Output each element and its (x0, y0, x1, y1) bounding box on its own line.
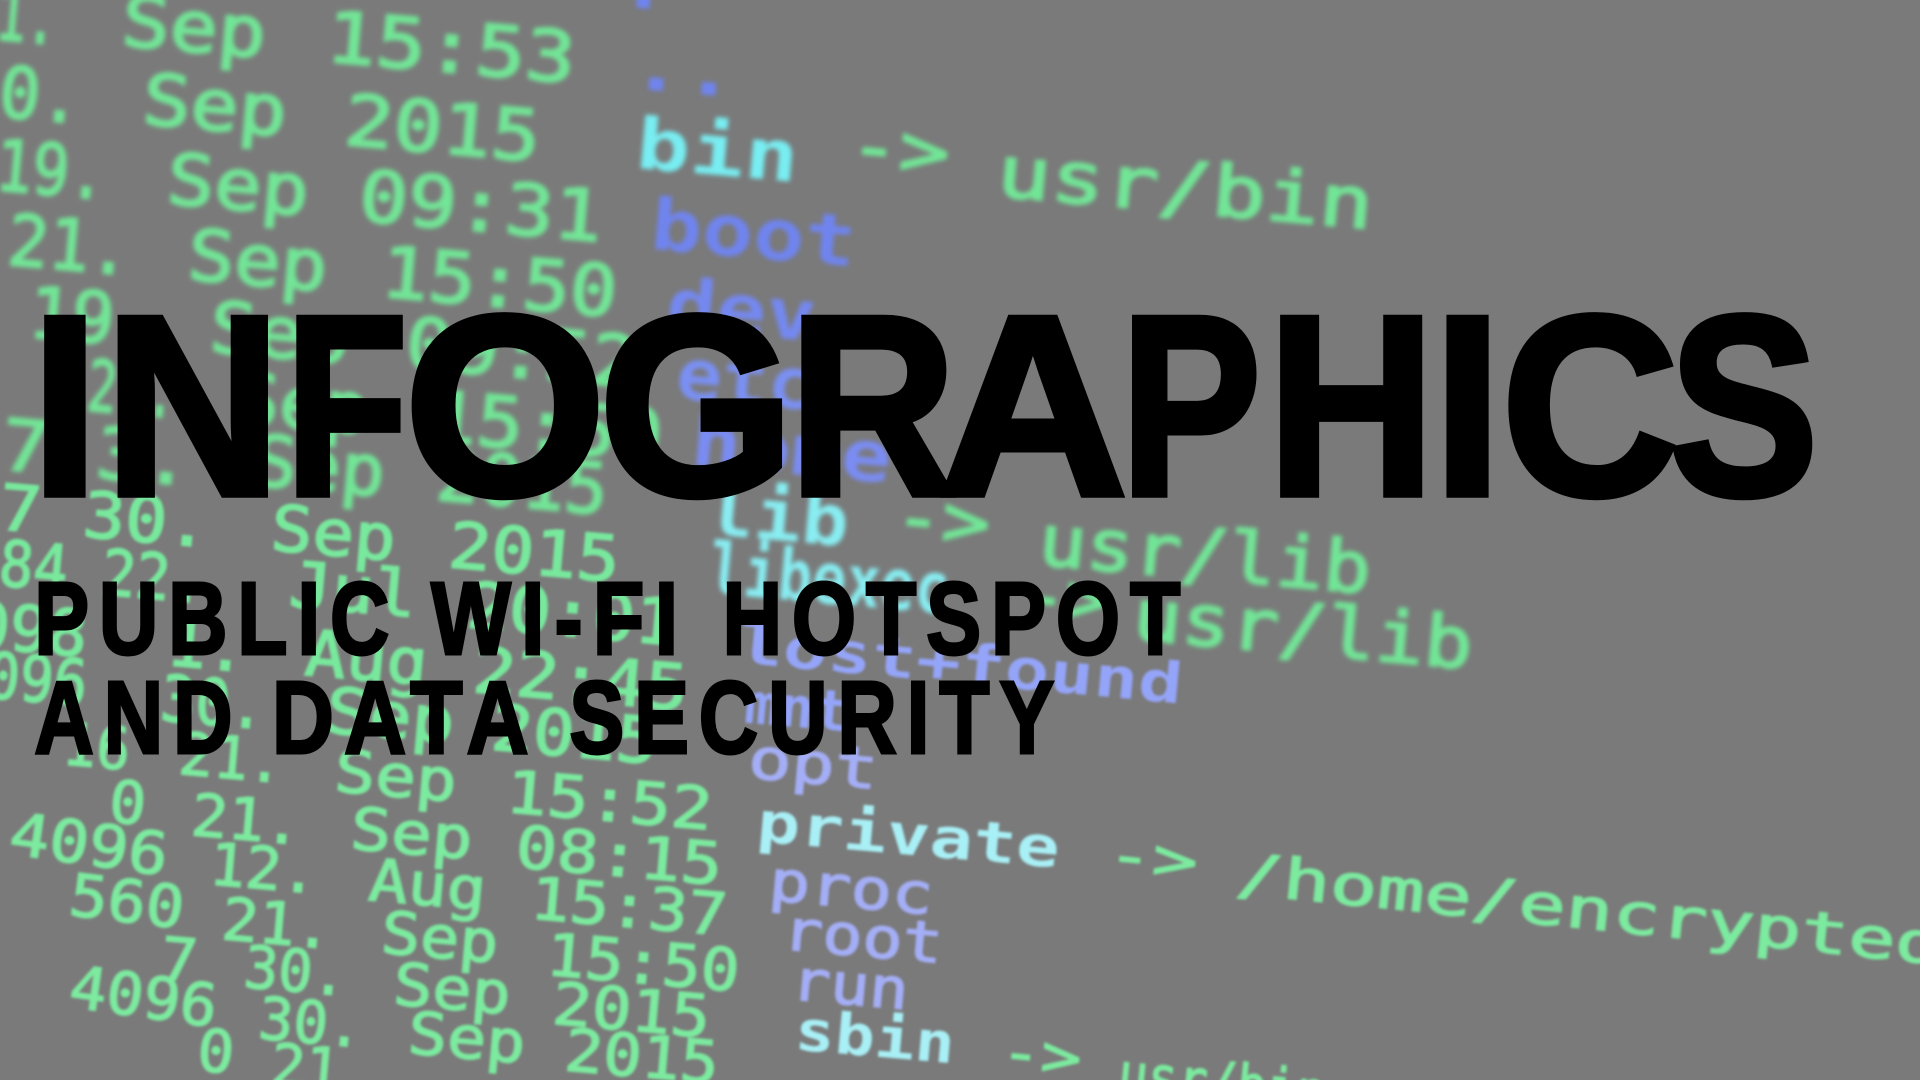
terminal listing: lower green date column: 2015 (550, 969, 713, 1051)
subtitle line 2: SECURITY (569, 660, 1064, 775)
terminal listing: upper green date column: 2015 (433, 434, 611, 531)
terminal listing: lower green date column: 4096 (65, 952, 222, 1041)
terminal listing: middle green date column: 30. (158, 662, 268, 745)
terminal listing: upper directory names: home (688, 400, 895, 500)
terminal listing: middle green date column: 1. (164, 607, 250, 688)
terminal listing: lower green date column: Sep (405, 998, 528, 1077)
terminal listing: middle green date column: 20:01 (464, 569, 680, 661)
terminal listing: upper green date column: 15:50 (378, 231, 621, 334)
terminal listing: lower directory names: sbin (792, 999, 958, 1077)
title: A (938, 263, 1128, 550)
title: O (404, 263, 606, 550)
terminal listing: upper green date column: Sep (139, 58, 291, 153)
terminal listing: lower directory names: /home/encrypted (1233, 842, 1920, 978)
terminal listing: upper green date column (0, 0, 666, 531)
subtitle line 1: PUBLIC (34, 561, 399, 676)
terminal listing: upper green date column: 15:50 (427, 375, 666, 478)
terminal listing: upper green date column: Sep (164, 138, 313, 233)
terminal listing: lower directory names (736, 612, 1920, 1080)
terminal listing: lower green date column: 560 (66, 860, 188, 943)
title: G (599, 263, 795, 550)
terminal listing: lower green date column: 21. (176, 719, 286, 797)
title: P (1120, 263, 1261, 550)
title: C (1501, 263, 1679, 550)
terminal listing: symlink targets: usr/bin (994, 130, 1377, 246)
terminal listing: lower green date column: 0 (107, 767, 149, 839)
terminal listing: upper directory names: etc (673, 332, 817, 427)
terminal listing: lower green date column: 7 (158, 924, 201, 996)
terminal listing: lower green date column: Sep (348, 794, 476, 873)
terminal listing: upper green date column: 19 (25, 271, 118, 361)
terminal listing: middle green date column: 7 30. (0, 471, 212, 563)
terminal listing: lower green date column: 12. (207, 829, 320, 907)
terminal listing: lower green date column: 21. (219, 884, 335, 963)
terminal listing: middle green date column: 2015 (488, 692, 661, 780)
terminal listing: symlink targets: -> (846, 103, 953, 195)
terminal listing: upper green date column: 21. (5, 199, 134, 292)
subtitle (34, 561, 1190, 775)
title: F (285, 263, 408, 550)
terminal listing: middle green date column: Sep (323, 674, 458, 759)
terminal listing: lower green date column: Sep (332, 736, 460, 816)
title: I (31, 263, 99, 550)
terminal listing: lower green date column: Aug (366, 845, 489, 924)
terminal listing: upper directory names: libexec (706, 527, 953, 631)
terminal listing: upper directory names: .. (628, 22, 740, 114)
terminal listing: lower green date column: 30. (241, 932, 350, 1010)
terminal listing: lower green date column: 08:15 (513, 812, 725, 899)
terminal listing: upper green date column: Sep (207, 286, 353, 381)
terminal listing: lower green date column: 30. (256, 984, 366, 1061)
terminal listing: symlink targets (846, 103, 1476, 686)
terminal listing: upper green date column: 09:31 (356, 155, 606, 259)
terminal listing: lower green date column: Sep (378, 898, 501, 977)
terminal listing: lower green date column: 4096 (5, 799, 173, 889)
terminal listing: lower green date column: 16 (60, 709, 133, 784)
terminal listing: middle green date column: Jul (286, 548, 420, 633)
terminal listing: upper green date column: Sep (185, 213, 331, 308)
terminal listing: lower directory names: run (789, 948, 911, 1023)
terminal listing: lower directory names: proc (767, 849, 936, 928)
title: S (1669, 263, 1818, 550)
terminal listing: middle green date column: 2015 (446, 509, 623, 598)
terminal listing: upper directory names (617, 0, 953, 631)
terminal listing: upper green date column: 7 3. (0, 403, 195, 502)
title: R (789, 263, 956, 550)
terminal listing: lower directory names: mnt (742, 672, 851, 745)
terminal listing: lower directory names: -> (1104, 822, 1201, 896)
terminal listing: lower directory names: root (780, 898, 945, 977)
terminal listing: upper directory names: dev (663, 262, 819, 358)
terminal listing: lower green date column: 15:37 (528, 864, 730, 949)
subtitle line 1: WI-FI (431, 561, 688, 676)
terminal listing: lower directory names: opt (746, 727, 881, 803)
terminal listing: upper directory names: bin (633, 102, 802, 199)
terminal listing: lower green date column: 15:52 (503, 757, 715, 844)
terminal listing: symlink targets: -> (1021, 553, 1111, 643)
terminal listing: middle green date column: 84 22. (0, 528, 208, 619)
terminal listing: upper green date column: 21. (84, 344, 179, 435)
subtitle line 2: DATA (272, 660, 539, 775)
title: N (104, 263, 282, 550)
terminal listing: symlink targets: usr/lib (1130, 573, 1476, 686)
terminal listing: symlink targets: usr/lib (1036, 499, 1375, 610)
terminal listing: upper green date column: 2015 (341, 79, 544, 179)
terminal listing: lower green date column: 15:50 (544, 920, 742, 1006)
terminal listing: upper green date column: Sep (231, 357, 373, 451)
terminal listing: lower directory names: private (754, 790, 1062, 882)
terminal listing: middle green date column: Aug (302, 617, 431, 701)
terminal listing: lower green date column (5, 709, 742, 1080)
terminal listing: symlink targets: -> (891, 474, 994, 565)
terminal listing: lower green date column: 21. (189, 780, 304, 859)
terminal listing: upper green date column: 09:52 (403, 302, 642, 405)
title: I (1433, 263, 1502, 550)
terminal listing: lower green date column: Sep (391, 949, 514, 1028)
terminal listing: middle green date column: Sep (268, 492, 399, 577)
terminal listing: upper green date column: Sep (250, 419, 389, 513)
subtitle line 2: AND (34, 660, 242, 775)
subtitle line 1: HOTSPOT (722, 561, 1190, 676)
terminal listing: lower directory names: lost+found (736, 612, 1186, 718)
terminal listing: middle green date column (0, 471, 691, 780)
title: H (1267, 263, 1435, 550)
terminal listing: upper directory names: boot (647, 183, 860, 283)
terminal listing: middle green date column: 22:45 (470, 634, 691, 727)
terminal listing: upper directory names: lib (704, 468, 853, 563)
